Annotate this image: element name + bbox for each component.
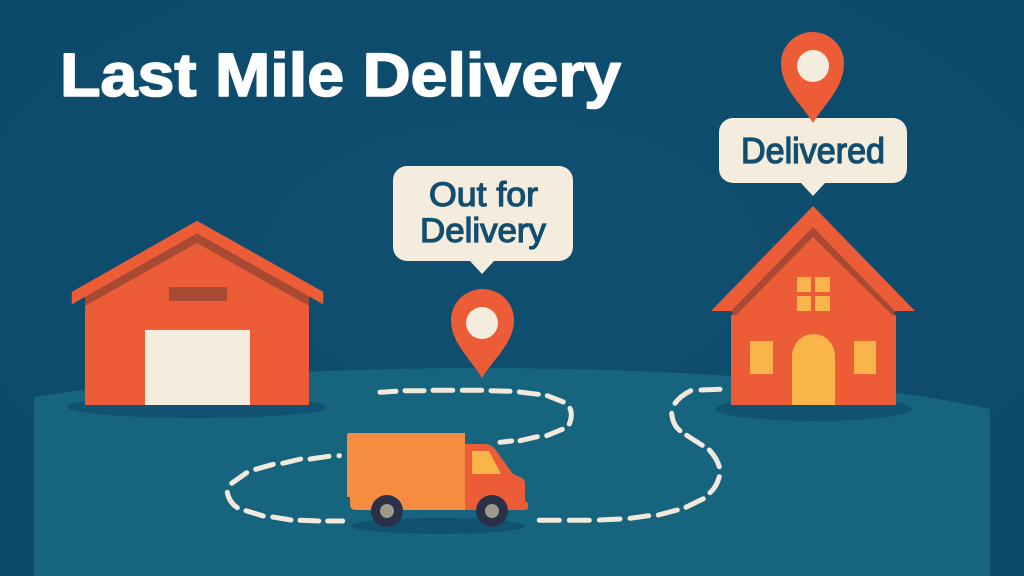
truck <box>347 433 528 534</box>
callout: out for delivery: Delivery <box>420 212 546 250</box>
house left window <box>750 341 773 374</box>
callout: out for delivery <box>393 166 573 274</box>
house body <box>731 235 896 405</box>
callout: delivered: Delivered <box>741 130 885 171</box>
truck front wheel <box>476 495 508 527</box>
dashed route: to house <box>539 389 720 520</box>
house roof shadow stripe <box>731 227 895 316</box>
house roof <box>711 206 915 311</box>
house shadow <box>716 397 912 421</box>
truck window <box>472 451 501 474</box>
pin: delivered <box>781 32 844 123</box>
warehouse roof shadow stripe <box>85 232 309 306</box>
truck cargo box <box>347 433 465 510</box>
truck cab <box>465 444 528 510</box>
warehouse shadow <box>67 396 327 418</box>
house attic window <box>797 277 830 311</box>
callout: delivered <box>719 118 907 196</box>
warehouse roof <box>72 221 323 304</box>
house door <box>792 334 835 405</box>
truck rear wheel <box>371 495 403 527</box>
warehouse body <box>85 240 309 405</box>
pin: out for delivery <box>451 289 514 378</box>
callout: out for delivery: Out for <box>429 176 538 214</box>
house <box>711 206 915 421</box>
truck shadow <box>351 518 525 534</box>
dashed route: lower loop <box>227 456 343 521</box>
ground <box>34 368 990 576</box>
warehouse vent <box>169 287 227 301</box>
warehouse <box>67 221 327 418</box>
title: Last Mile Delivery <box>60 41 621 109</box>
dashed route: upper loop <box>380 390 571 442</box>
house right window <box>854 341 876 374</box>
warehouse door <box>145 330 250 405</box>
